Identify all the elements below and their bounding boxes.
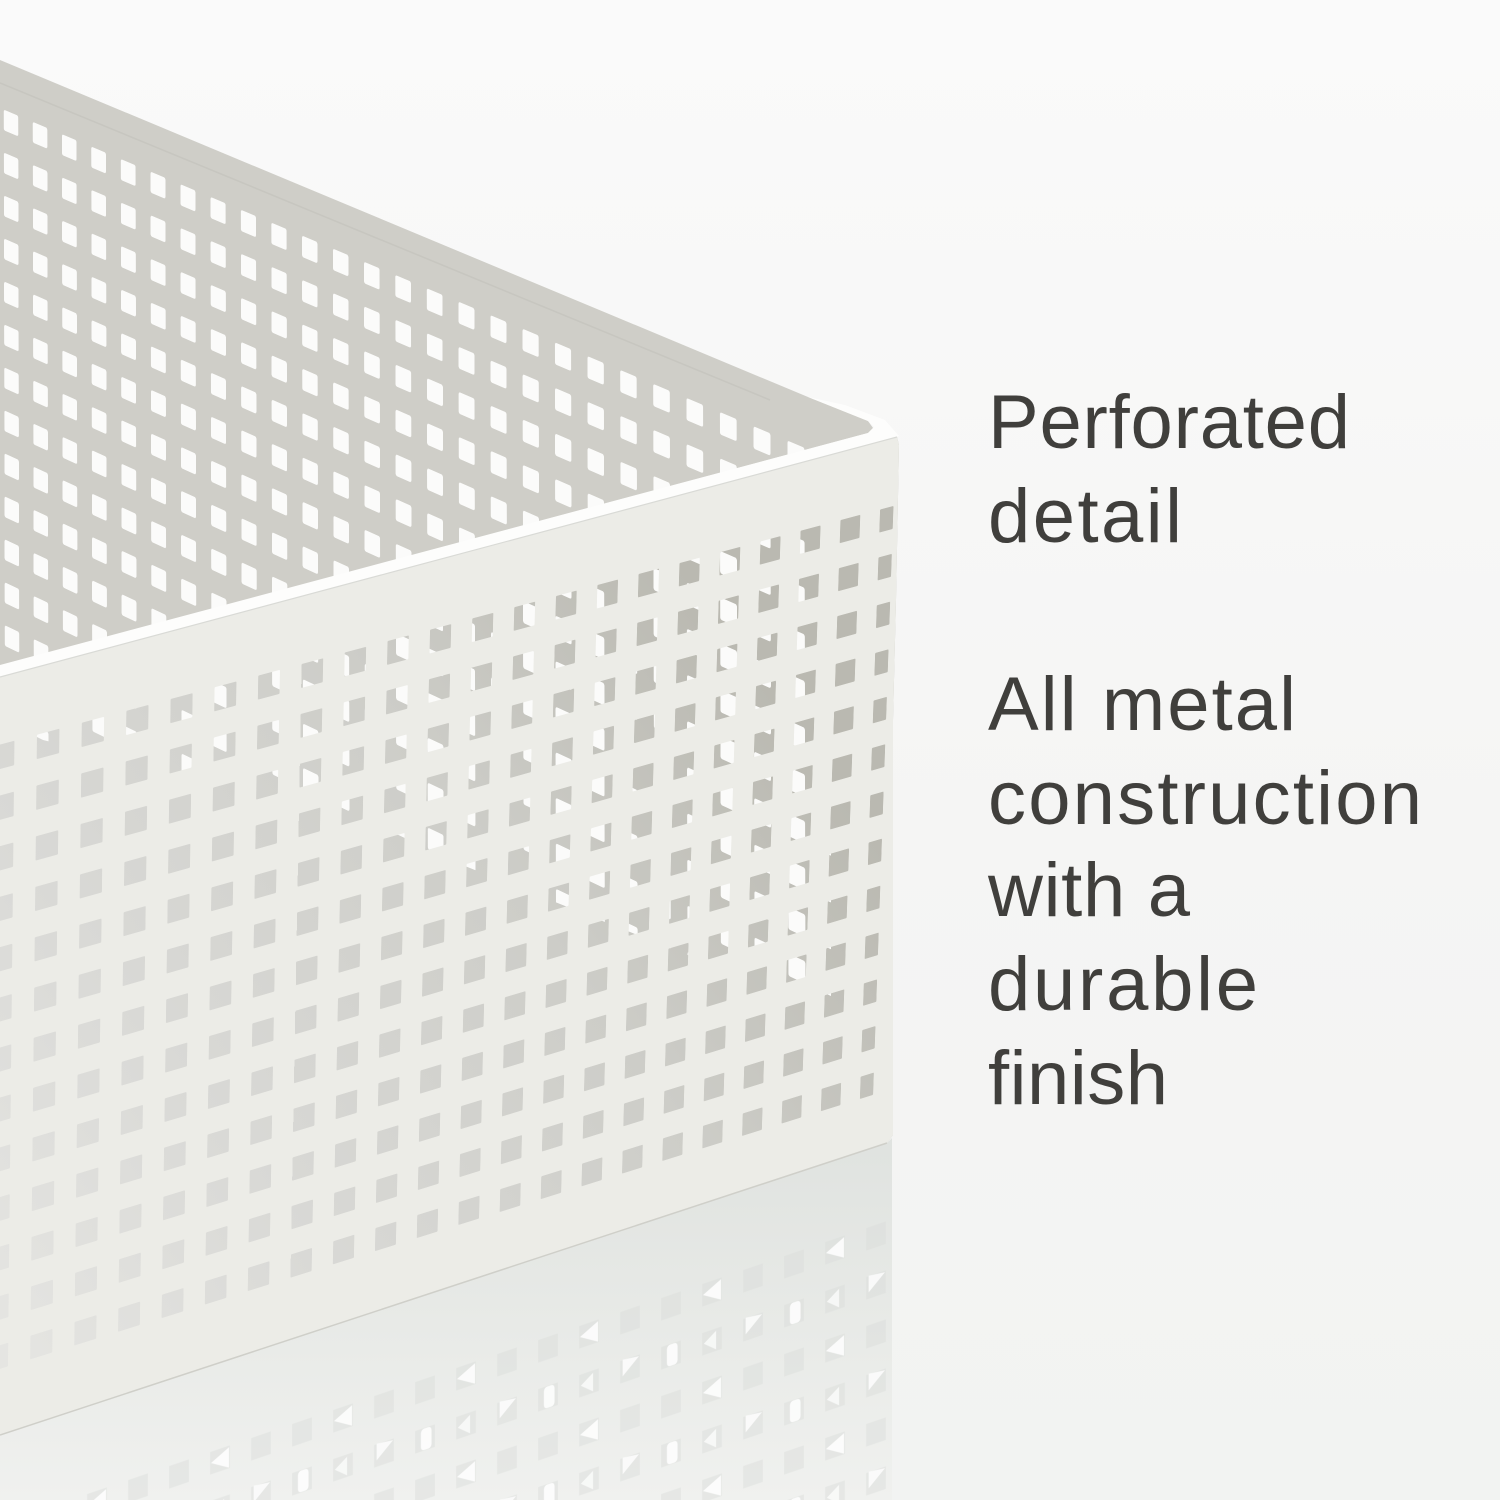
panel: perforated inner back wall xyxy=(0,60,873,665)
heading: all metal construction: with a xyxy=(987,848,1191,933)
heading: all metal construction: durable xyxy=(988,942,1258,1027)
panel: perforated front wall xyxy=(0,438,899,1408)
interior seen through the front perforations xyxy=(0,438,899,1369)
heading: all metal construction xyxy=(987,662,1422,1121)
heading: all metal construction: finish xyxy=(988,1036,1168,1121)
heading: perforated detail: Perforated xyxy=(988,380,1350,465)
heading: all metal construction: construction xyxy=(988,756,1422,841)
heading: perforated detail: detail xyxy=(988,474,1182,559)
heading: all metal construction: All metal xyxy=(988,662,1296,747)
heading: perforated detail xyxy=(988,380,1350,559)
